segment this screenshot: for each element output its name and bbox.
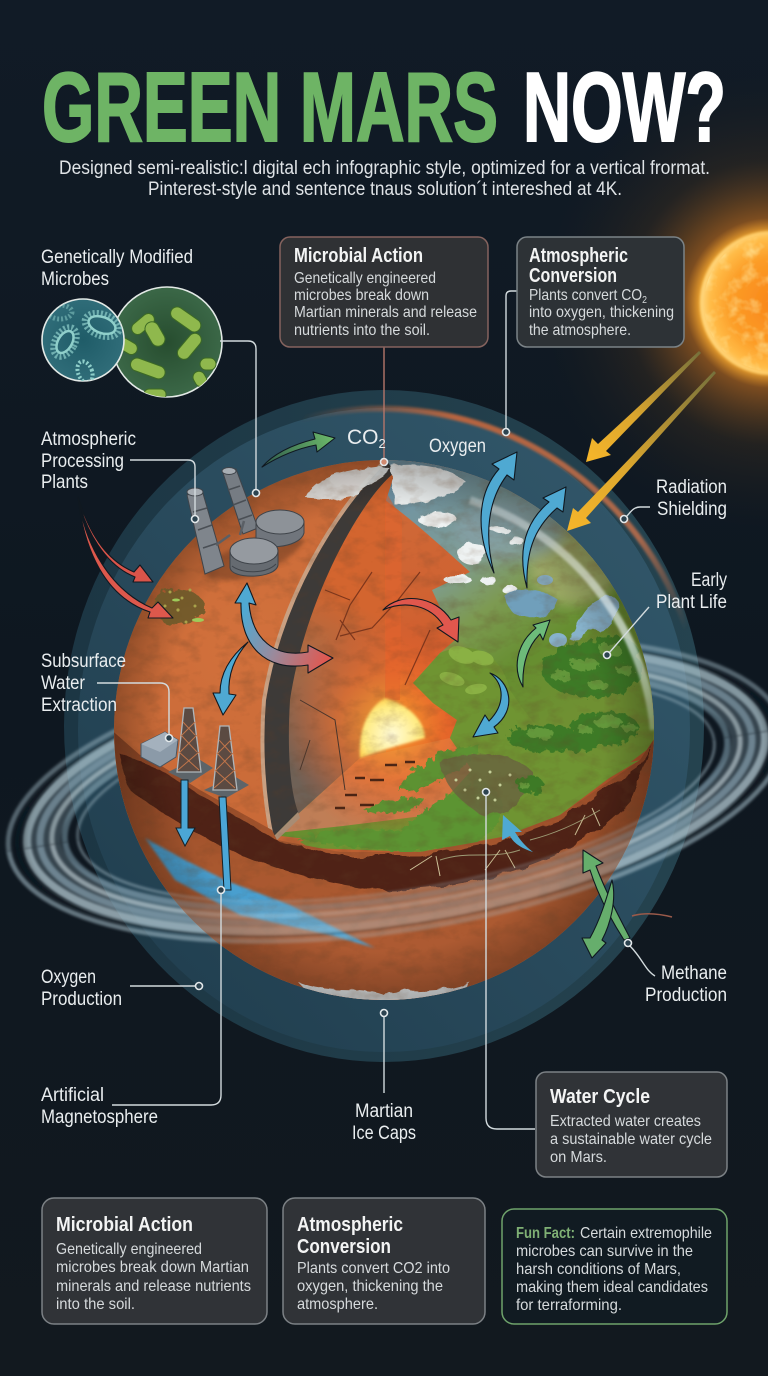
panel: fun fact: making them ideal candidates xyxy=(516,1279,708,1296)
red arc arrow xyxy=(383,599,459,642)
leader end points xyxy=(166,428,632,1016)
panel: microbial action: microbes break down Martian xyxy=(56,1259,249,1276)
panel: atmospheric conversion xyxy=(283,1198,485,1324)
panel: microbial action: minerals and release nutrients xyxy=(56,1278,251,1295)
label: artificial magnetosphere xyxy=(41,1085,158,1128)
label: atmospheric processing plants: Atmospheric xyxy=(41,429,136,450)
methane arrows xyxy=(582,850,672,958)
planetary rings: back half xyxy=(0,590,768,851)
label: atmospheric processing plants xyxy=(41,429,136,493)
sunlight arrow 2 xyxy=(567,371,716,531)
red arrow into microbes 2 xyxy=(78,497,173,618)
bottom ice cap xyxy=(298,982,470,1000)
vegetation bushes xyxy=(507,636,642,794)
sun xyxy=(596,124,768,484)
label: radiation shielding xyxy=(656,477,727,520)
callout: microbial action: Genetically engineered xyxy=(294,270,436,287)
red arrow into microbes 1 xyxy=(78,497,153,582)
blue down arrow xyxy=(213,642,248,715)
panel: atmospheric conversion: Plants convert CO2 into xyxy=(297,1260,450,1277)
subtitle: Pinterest-style and sentence tnaus solution´t interеshed at 4K. xyxy=(148,179,622,200)
callout: atmospheric conversion: Plants convert CO xyxy=(529,287,659,304)
green CO2 arrow xyxy=(262,432,335,467)
leader: artificial magnetosphere xyxy=(112,893,221,1105)
panel: fun fact: harsh conditions of Mars, xyxy=(516,1261,681,1278)
limb shading xyxy=(114,460,654,1000)
aquifer xyxy=(145,838,375,948)
label: genetically modified microbes xyxy=(41,247,193,290)
oil derricks and shed xyxy=(141,708,249,798)
label: subsurface water extraction: Water xyxy=(41,673,86,694)
panel: fun fact: microbes can survive in the xyxy=(516,1243,693,1260)
label: radiation shielding: Radiation xyxy=(656,477,727,498)
oxygen arrow 1 xyxy=(481,452,517,573)
leader: microbial action xyxy=(383,347,385,459)
blue haze and water xyxy=(455,500,620,647)
label: radiation shielding: Shielding xyxy=(657,499,727,520)
panel: atmospheric conversion: Atmospheric xyxy=(297,1214,403,1236)
oxygen arrow 2 xyxy=(523,487,566,588)
callout: water cycle: Water Cycle xyxy=(550,1086,650,1108)
label: early plant life xyxy=(656,570,727,613)
callout: atmospheric conversion: Atmospheric xyxy=(529,245,628,267)
label: artificial magnetosphere: Magnetosphere xyxy=(41,1107,158,1128)
label: martian ice caps: Ice Caps xyxy=(352,1123,416,1144)
panel: fun fact xyxy=(502,1209,727,1324)
water extraction pipes xyxy=(176,780,231,890)
label: methane production xyxy=(645,963,727,1006)
panel: microbial action: Genetically engineered xyxy=(56,1241,202,1258)
callout: atmospheric conversion: 2 xyxy=(642,295,647,306)
planet core xyxy=(360,698,425,758)
sunlight arrow 1 xyxy=(586,351,701,462)
callout: microbial action: microbes break down xyxy=(294,287,429,304)
surface: upper right terraformed hemisphere xyxy=(272,456,660,852)
leader: ice caps xyxy=(383,1016,385,1093)
microbe soil patch xyxy=(152,588,204,625)
small blue arrow xyxy=(502,815,533,852)
dark cut rim xyxy=(262,460,395,838)
leader: water extraction xyxy=(97,683,169,735)
callout: atmospheric conversion xyxy=(517,237,684,347)
panel: microbial action: Microbial Action xyxy=(56,1214,193,1236)
leader: microbes xyxy=(220,341,256,490)
panel: microbial action: into the soil. xyxy=(56,1296,135,1313)
label: subsurface water extraction xyxy=(41,651,126,716)
label: early plant life: Early xyxy=(691,570,727,591)
microbe circles xyxy=(42,287,222,400)
atmospheric processing plant xyxy=(187,468,305,580)
label: subsurface water extraction: Subsurface xyxy=(41,651,126,672)
callout: microbial action: Martian minerals and release xyxy=(294,304,477,321)
subtitle xyxy=(59,158,710,200)
label: martian ice caps: Martian xyxy=(355,1101,413,1122)
planetary rings: front half xyxy=(5,730,768,945)
panel: fun fact: Fun Fact: xyxy=(516,1225,575,1242)
label: atmospheric processing plants: Plants xyxy=(41,472,88,493)
panel: atmospheric conversion: oxygen, thickening the xyxy=(297,1278,443,1295)
lower green land xyxy=(296,643,640,852)
label: martian ice caps xyxy=(352,1101,416,1144)
leader: water cycle xyxy=(486,795,535,1129)
callout: microbial action xyxy=(280,237,488,347)
label: artificial magnetosphere: Artificial xyxy=(41,1085,104,1106)
leader: oxygen production xyxy=(130,985,195,987)
planet Mars xyxy=(108,456,660,1006)
green arc arrow xyxy=(517,620,550,687)
label: early plant life: Plant Life xyxy=(656,592,727,613)
callout: water cycle: a sustainable water cycle xyxy=(550,1131,712,1148)
leader: atmospheric conversion xyxy=(506,291,517,429)
panel: fun fact: Certain extremophile xyxy=(580,1225,712,1242)
callout: microbial action: nutrients into the soil. xyxy=(294,322,430,339)
leader: radiation shielding xyxy=(626,507,650,517)
callout: water cycle xyxy=(536,1072,727,1177)
label: CO2: 2 xyxy=(378,436,386,451)
label: oxygen production: Production xyxy=(41,989,122,1010)
subsurface strata xyxy=(108,727,660,1006)
ice and clouds xyxy=(306,465,523,594)
leader: methane xyxy=(630,946,655,976)
title: GREEN MARS xyxy=(42,52,498,162)
callout: atmospheric conversion: Conversion xyxy=(529,265,617,287)
panel: microbial action xyxy=(42,1198,267,1324)
panel: fun fact: for terraforming. xyxy=(516,1297,622,1314)
orange cutaway interior xyxy=(277,474,472,833)
subtitle: Designed semi-realistic:l digital ech infographic style, optimized for a vertical frormat. xyxy=(59,158,710,179)
panel: atmospheric conversion: atmosphere. xyxy=(297,1296,378,1313)
blue arc arrow xyxy=(473,673,509,737)
label: CO2: CO xyxy=(347,426,378,449)
callout: water cycle: Extracted water creates xyxy=(550,1113,701,1130)
blue-red exchange arrow xyxy=(235,583,333,673)
label: subsurface water extraction: Extraction xyxy=(41,695,117,716)
label: oxygen: Oxygen xyxy=(429,436,486,457)
label: methane production: Production xyxy=(645,985,727,1006)
label: methane production: Methane xyxy=(661,963,727,984)
callout: atmospheric conversion: into oxygen, thickening xyxy=(529,304,674,321)
label: atmospheric processing plants: Processing xyxy=(41,451,124,472)
label: oxygen production xyxy=(41,967,122,1010)
callout: microbial action: Microbial Action xyxy=(294,245,423,267)
atmosphere shell xyxy=(64,390,704,1062)
label: oxygen production: Oxygen xyxy=(41,967,96,988)
callout: water cycle: on Mars. xyxy=(550,1149,607,1166)
label: genetically modified microbes: Microbes xyxy=(41,269,109,290)
label: genetically modified microbes: Genetically Modified xyxy=(41,247,193,268)
callout: atmospheric conversion: the atmosphere. xyxy=(529,322,631,339)
leader: early plant life xyxy=(609,607,649,653)
leader: processing plants xyxy=(130,460,195,516)
panel: atmospheric conversion: Conversion xyxy=(297,1236,391,1258)
